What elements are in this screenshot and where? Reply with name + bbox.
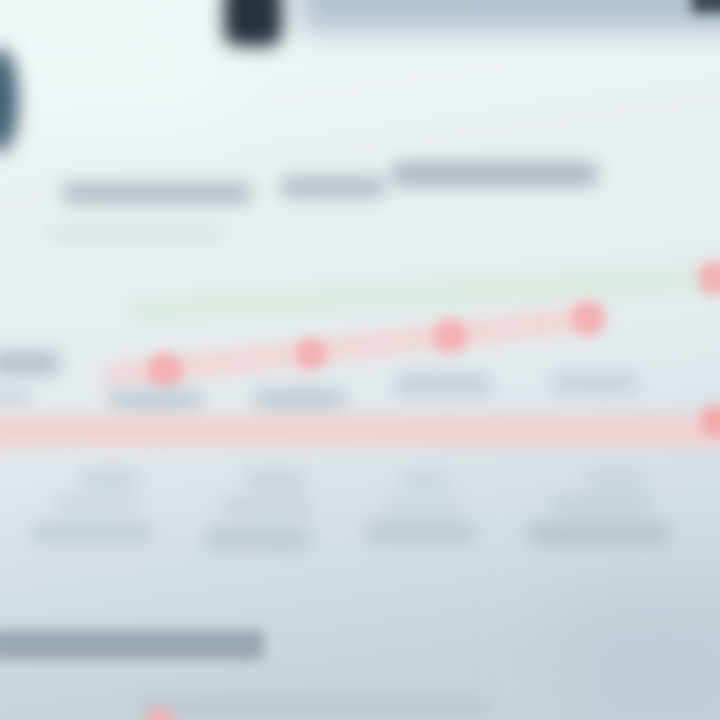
pink point at bottom [145, 707, 175, 720]
dark object at left edge [0, 48, 18, 152]
blurred axis labels [0, 352, 637, 412]
dark object at top right [692, 0, 720, 13]
pink data points [147, 261, 720, 389]
blurred bottom heading [0, 630, 264, 660]
dark backdrop strip along the top [300, 0, 720, 32]
pink trend line [105, 306, 600, 388]
blurred bottom text line [140, 698, 490, 716]
blurred title [45, 162, 597, 240]
dark object at top centre [224, 0, 282, 46]
green trend band [130, 262, 720, 324]
blurred lower labels [32, 470, 668, 550]
pink horizontal band [0, 416, 720, 446]
pink band end point [700, 405, 720, 437]
